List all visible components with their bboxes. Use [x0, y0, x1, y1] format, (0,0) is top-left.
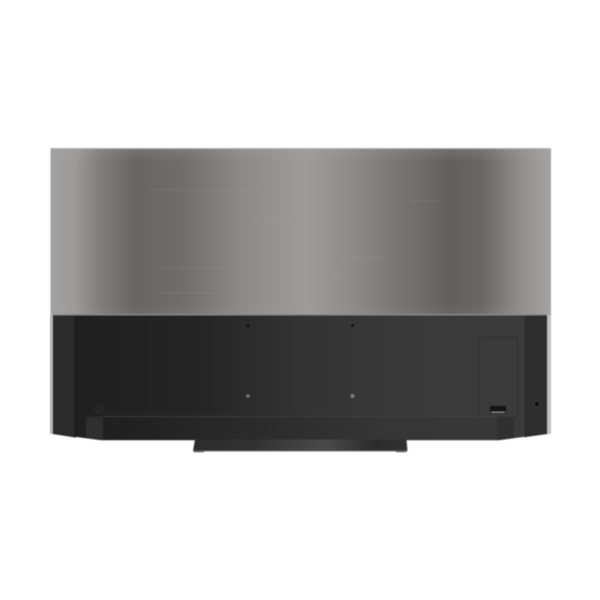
right edge strip — [526, 316, 547, 437]
headphone jack, right — [534, 401, 540, 407]
left edge strip — [53, 316, 75, 438]
VESA mounting holes — [246, 324, 354, 398]
side button, left — [96, 406, 102, 412]
dark lower rear housing — [53, 316, 547, 440]
lower horizontal bar — [86, 416, 514, 440]
metal upper back panel — [50, 148, 551, 434]
cover plate and port — [480, 338, 518, 418]
stand base — [193, 440, 408, 452]
